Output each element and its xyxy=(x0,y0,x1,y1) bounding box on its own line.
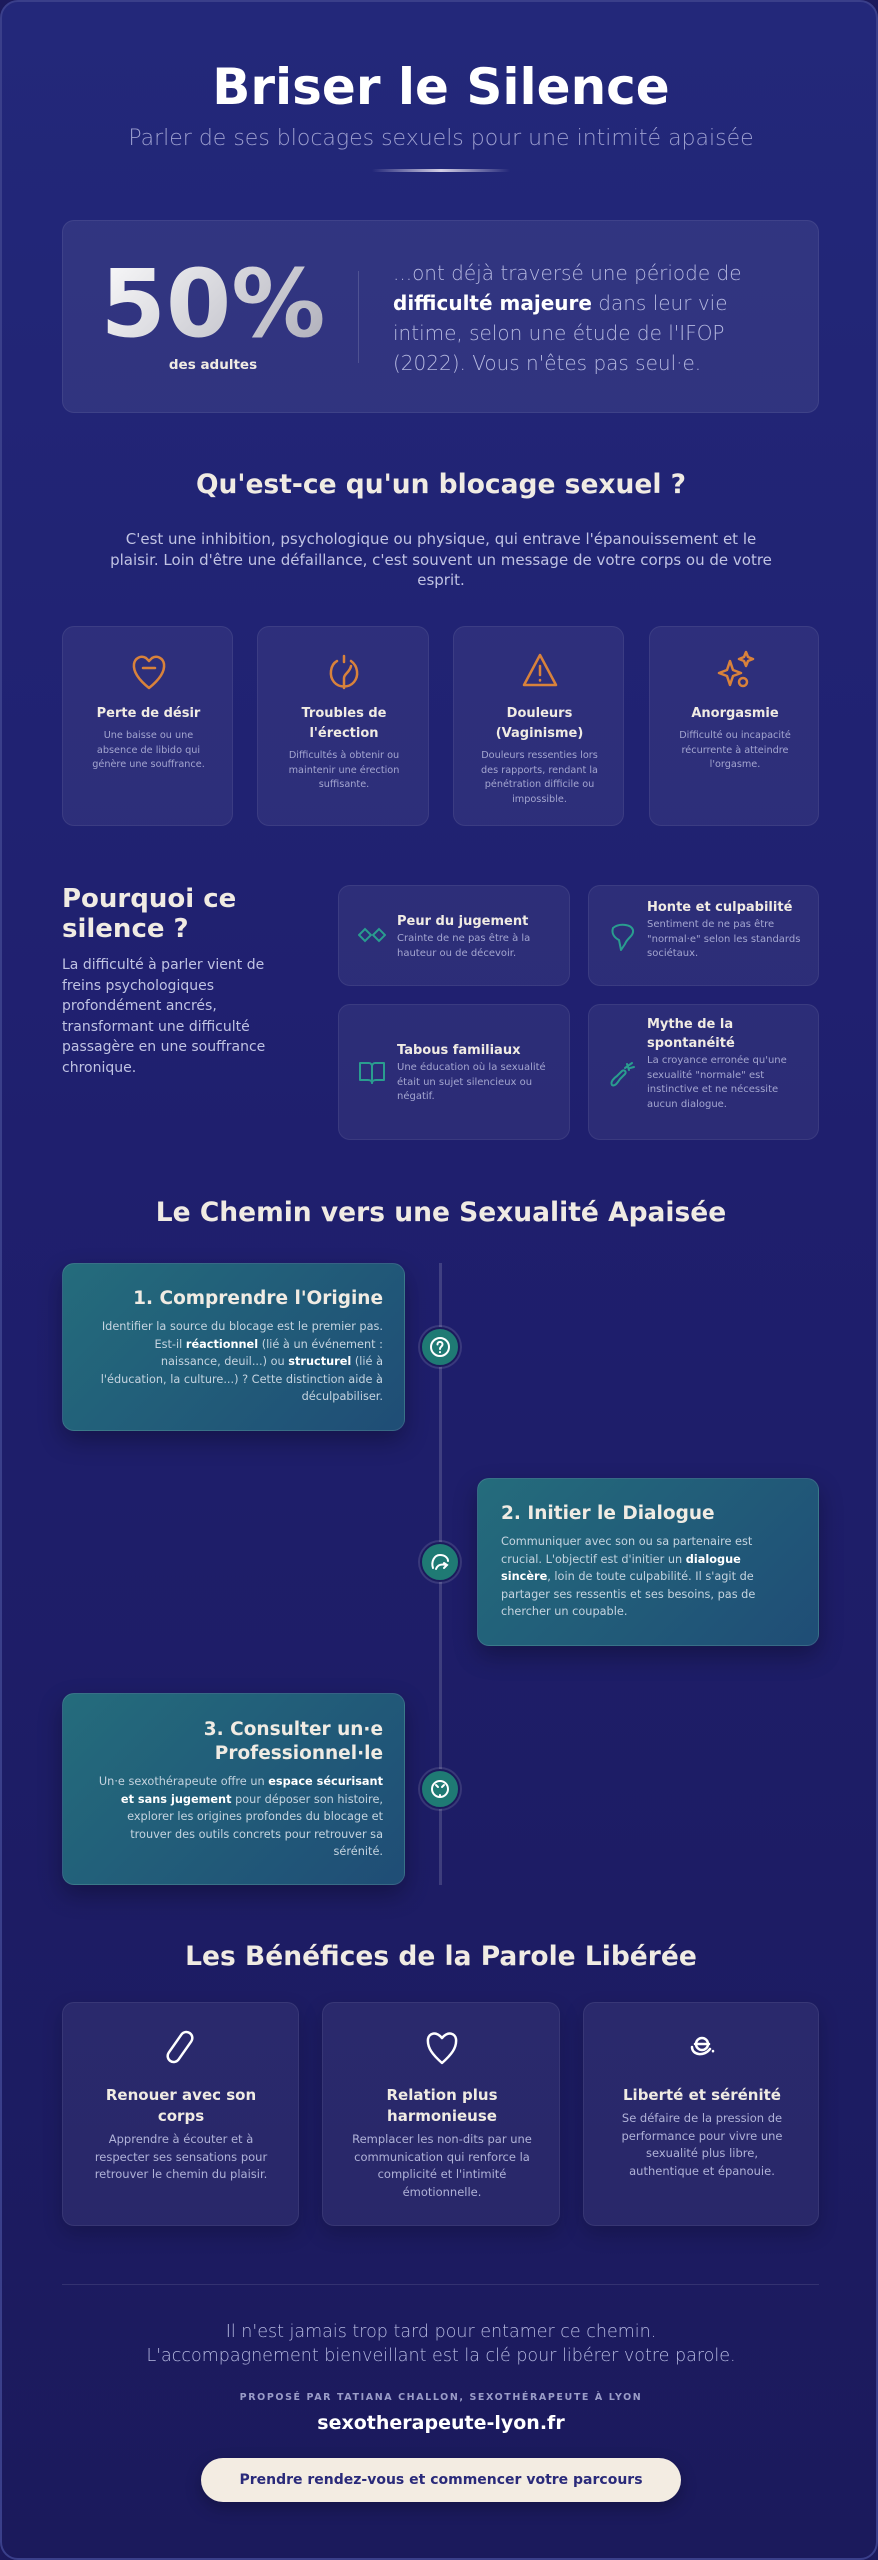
card: tabous xyxy=(338,1004,570,1140)
card: anorgasmie: Difficulté ou incapacité récurrente à atteindre l'orgasme. xyxy=(679,730,791,770)
icon: heart xyxy=(426,2032,458,2064)
divider xyxy=(62,2284,819,2285)
closing text: Il n'est jamais trop tard pour entamer ce chemin. xyxy=(226,2322,656,2342)
card: douleurs: Douleurs (Vaginisme) xyxy=(496,706,583,741)
card: douleurs xyxy=(453,626,624,826)
heading: bénéfices: Les Bénéfices de la Parole Libérée xyxy=(185,1941,697,1972)
card: mythe xyxy=(588,1004,819,1140)
card: troubles érection: Difficultés à obtenir ou maintenir une érection suffisante. xyxy=(289,750,399,790)
closing text xyxy=(146,2322,736,2366)
card: tabous: Une éducation où la sexualité était un sujet silencieux ou négatif. xyxy=(397,1062,546,1102)
step 1: Identifier la source du blocage est le premier pas. Est-il réactionnel (lié à un événement : naissance, deuil...) ou structurel (lié à l'éducation, la culture...) ? Cette distinction aide à déculpabiliser. xyxy=(101,1320,383,1403)
closing text: L'accompagnement bienveillant est la clé pour libérer votre parole. xyxy=(146,2346,736,2366)
step 2 xyxy=(477,1478,819,1646)
benefit: liberté: Se défaire de la pression de performance pour vivre une sexualité plus libre, authentique et épanouie. xyxy=(622,2111,782,2178)
card: troubles érection: Troubles de l'érection xyxy=(301,706,386,741)
icon: warning xyxy=(522,654,558,686)
step 1 xyxy=(62,1263,405,1431)
card: mythe: Mythe de la spontanéité xyxy=(647,1017,735,1051)
big number: 50% xyxy=(100,250,326,359)
timeline line xyxy=(439,1263,442,1885)
icon: pill xyxy=(166,2030,194,2064)
benefit: liberté: Liberté et sérénité xyxy=(623,2086,781,2104)
benefit: liberté xyxy=(583,2002,819,2226)
card: anorgasmie xyxy=(649,626,819,826)
card: tabous: Tabous familiaux xyxy=(397,1043,520,1058)
cta button: Prendre rendez-vous et commencer votre parcours xyxy=(239,2472,643,2488)
title: Briser le Silence xyxy=(212,58,670,116)
separator xyxy=(358,271,359,363)
intro text: C'est une inhibition, psychologique ou physique, qui entrave l'épanouissement et le plaisir. Loin d'être une défaillance, c'est souvent un message de votre corps ou de votre esprit. xyxy=(110,530,772,589)
card: peur du jugement: Peur du jugement xyxy=(397,914,528,929)
card: perte de désir: Perte de désir xyxy=(97,706,200,721)
card: peur du jugement xyxy=(338,885,570,986)
icon: heart minus xyxy=(132,656,166,690)
step 2: Communiquer avec son ou sa partenaire est crucial. L'objectif est d'initier un dialogue sincère, loin de toute culpabilité. Il s'agit de partager ses ressentis et ses besoins, pas de chercher un coupable. xyxy=(501,1535,755,1618)
icon: lightbulb-ish xyxy=(612,924,634,951)
card: perte de désir: Une baisse ou une absence de libido qui génère une souffrance. xyxy=(92,730,205,770)
number caption: des adultes xyxy=(169,357,257,373)
card: honte xyxy=(588,885,819,986)
credit: PROPOSÉ PAR TATIANA CHALLON, SEXOTHÉRAPEUTE À LYON xyxy=(240,2392,642,2403)
cta button xyxy=(201,2458,681,2502)
card: mythe: La croyance erronée qu'une sexualité "normale" est instinctive et ne nécessite aucun dialogue. xyxy=(647,1055,787,1110)
card: peur du jugement: Crainte de ne pas être à la hauteur ou de décevoir. xyxy=(397,933,530,958)
benefit: relation: Relation plus harmonieuse xyxy=(386,2086,498,2125)
benefit: renouer xyxy=(62,2002,299,2226)
icon: sparkles xyxy=(718,650,754,688)
heading: blocage: Qu'est-ce qu'un blocage sexuel ? xyxy=(196,469,686,500)
icon: power xyxy=(330,654,358,690)
icon: step 2 dialogue xyxy=(420,1542,460,1582)
card: troubles érection xyxy=(257,626,429,826)
icon: step 1 question xyxy=(420,1327,460,1367)
pourquoi text: La difficulté à parler vient de freins psychologiques profondément ancrés, transformant une difficulté passagère en une souffrance chronique. xyxy=(62,957,265,1076)
step 1: 1. Comprendre l'Origine xyxy=(133,1288,383,1309)
stat text: ...ont déjà traversé une période de difficulté majeure dans leur vie intime, selon une étude de l'IFOP (2022). Vous n'êtes pas seul·e. xyxy=(393,261,742,375)
icon: step 3 xyxy=(420,1769,460,1809)
benefit: relation xyxy=(322,2002,560,2226)
card: anorgasmie: Anorgasmie xyxy=(691,706,779,721)
card: honte: Sentiment de ne pas être "normal·e" selon les standards sociétaux. xyxy=(647,919,800,959)
website: sexotherapeute-lyon.fr xyxy=(317,2412,565,2434)
card: perte de désir xyxy=(62,626,233,826)
heading: pourquoi: Pourquoi ce silence ? xyxy=(62,884,236,944)
title underline xyxy=(372,169,510,172)
step 3: 3. Consulter un·e Professionnel·le xyxy=(204,1719,383,1764)
panel: statistic xyxy=(62,220,819,413)
card: honte: Honte et culpabilité xyxy=(647,900,792,915)
icon: infinity diamonds xyxy=(358,928,386,942)
icon: book xyxy=(359,1062,385,1084)
subtitle: Parler de ses blocages sexuels pour une intimité apaisée xyxy=(128,126,754,151)
benefit: renouer: Renouer avec son corps xyxy=(106,2086,256,2125)
step 3: Un·e sexothérapeute offre un espace sécurisant et sans jugement pour déposer son histoire, explorer les origines profondes du blocage et trouver des outils concrets pour retrouver sa sérénité. xyxy=(99,1775,383,1858)
benefit: relation: Remplacer les non-dits par une communication qui renforce la complicité et l'intimité émotionnelle. xyxy=(352,2132,532,2198)
icon: brush xyxy=(610,1062,635,1086)
card: douleurs: Douleurs ressenties lors des rapports, rendant la pénétration difficile ou impossible. xyxy=(481,750,598,804)
step 3 xyxy=(62,1693,405,1885)
step 2: 2. Initier le Dialogue xyxy=(501,1503,715,1524)
heading: chemin: Le Chemin vers une Sexualité Apaisée xyxy=(156,1197,726,1228)
benefit: renouer: Apprendre à écouter et à respecter ses sensations pour retrouver le chemin du plaisir. xyxy=(95,2132,267,2181)
icon: spiral xyxy=(690,2036,714,2056)
